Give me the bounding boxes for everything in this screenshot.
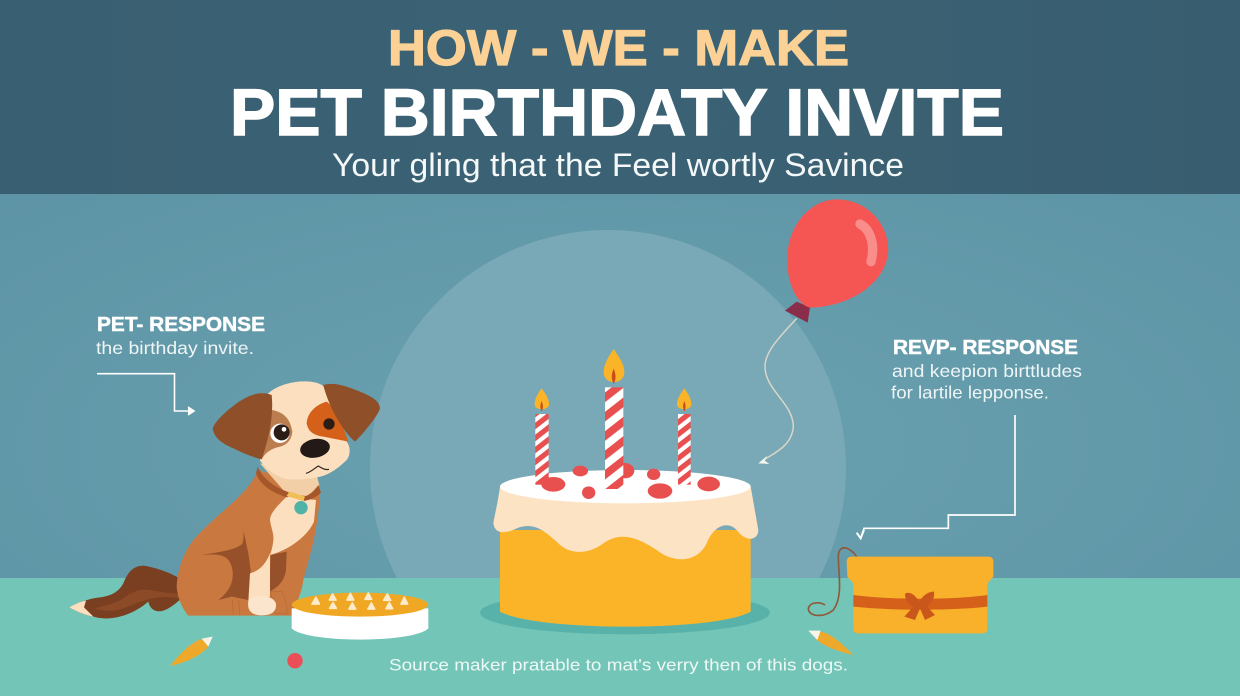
left ear	[213, 393, 272, 459]
mouth	[306, 466, 329, 473]
gift box	[808, 548, 993, 633]
front leg	[248, 553, 270, 602]
sprinkles	[541, 466, 720, 499]
birthday cake	[480, 349, 770, 634]
title line one: HOW - WE - MAKE	[388, 20, 849, 76]
belly shading	[269, 552, 287, 592]
box	[847, 557, 993, 633]
bow	[904, 592, 935, 620]
back paw	[271, 592, 287, 613]
balloon knot	[785, 302, 810, 323]
balloon	[758, 199, 888, 464]
kibble toppings	[312, 593, 408, 609]
centre candle	[604, 349, 624, 489]
eyes	[270, 418, 335, 443]
backdrop circle	[370, 230, 846, 696]
body	[177, 470, 320, 616]
floor	[0, 578, 1240, 696]
food bowl	[292, 593, 428, 640]
nose	[299, 437, 331, 460]
head	[260, 381, 350, 479]
tail	[69, 566, 182, 618]
eye patch right	[307, 402, 348, 442]
right ear	[323, 384, 380, 442]
callout: pet response	[96, 314, 265, 358]
carrot right	[808, 631, 853, 655]
footer source note: Source maker pratable to mat's verry then of this dogs.	[389, 656, 848, 674]
string arrowhead	[758, 456, 769, 464]
callout heading: REVP- RESPONSE	[893, 337, 1078, 359]
eye patch left	[262, 410, 292, 459]
arrow: rsvp callout to gift	[857, 415, 1015, 538]
collar	[256, 467, 321, 514]
chest	[270, 497, 316, 555]
balloon string	[763, 318, 797, 461]
callout text: the birthday invite.	[96, 338, 254, 358]
balloon highlight	[860, 224, 873, 262]
callout heading: PET- RESPONSE	[97, 314, 265, 336]
ribbon	[853, 595, 987, 610]
cake shadow	[480, 591, 770, 634]
dog illustration	[69, 381, 380, 618]
callout: rsvp response: for lartile lepponse.	[891, 382, 1049, 402]
balloon body	[787, 199, 888, 308]
carrot left	[170, 637, 213, 666]
neck	[260, 463, 319, 497]
callout text: and keepion birttludes	[892, 361, 1082, 381]
arrow: pet callout to dog	[97, 374, 194, 415]
haunch shading	[202, 530, 251, 600]
right candle	[677, 388, 691, 485]
front paw	[248, 596, 276, 615]
toe lines	[232, 600, 240, 615]
header banner	[0, 0, 1240, 194]
gift cord	[808, 548, 857, 615]
title line two: PET BIRTHDATY INVITE	[230, 75, 1004, 149]
cake body	[500, 530, 751, 627]
subtitle: Your gling that the Feel wortly Savince	[332, 147, 904, 183]
background	[0, 194, 1240, 696]
callout: rsvp response	[891, 337, 1082, 402]
red ball	[287, 653, 303, 668]
sprinkle behind candle	[616, 463, 634, 478]
icing	[493, 487, 758, 559]
left candle	[535, 388, 549, 485]
cake top	[500, 470, 751, 503]
